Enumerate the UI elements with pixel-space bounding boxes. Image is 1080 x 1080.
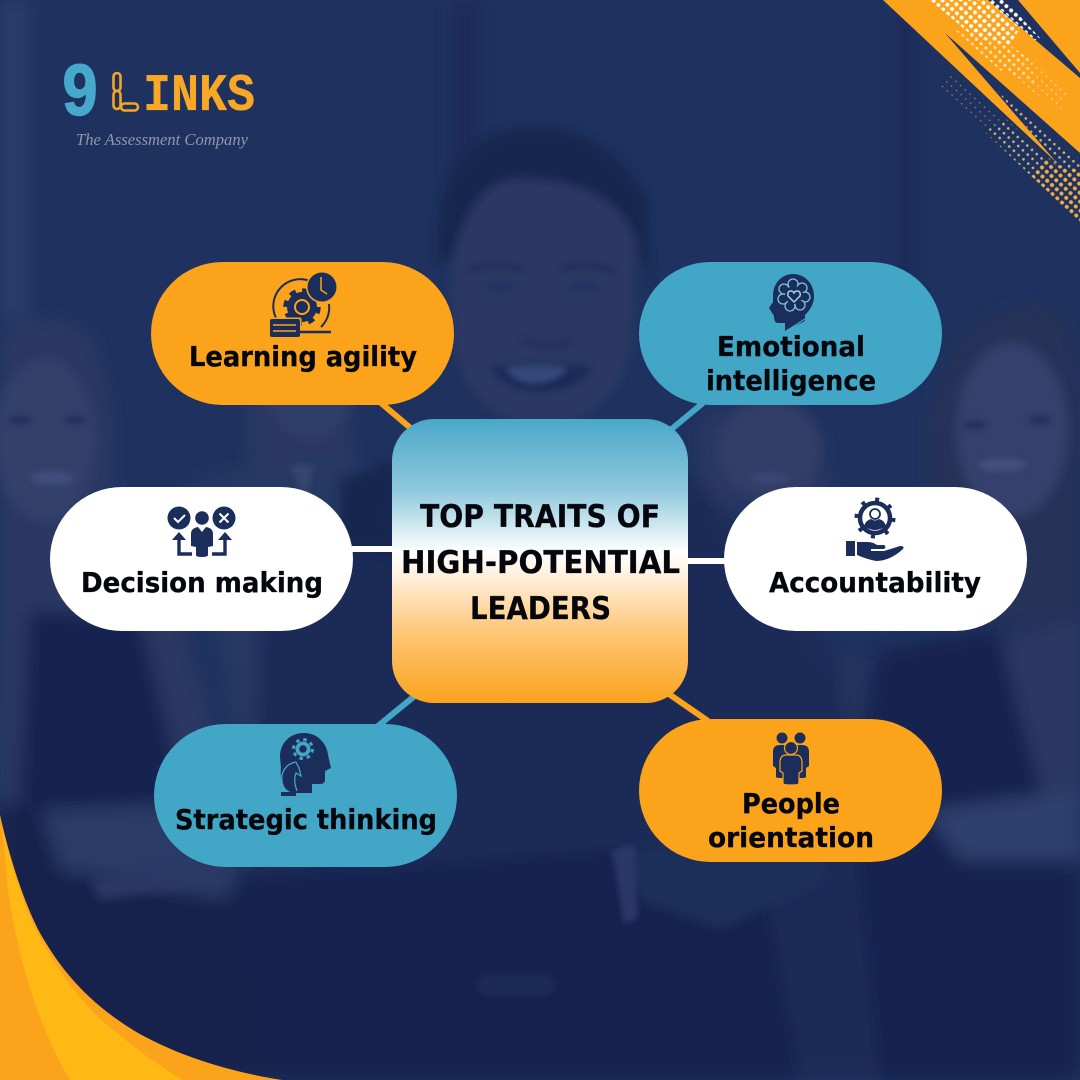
center panel: title xyxy=(392,419,688,703)
panel: emotional intelligence xyxy=(639,262,942,405)
label: Strategic thinking xyxy=(175,804,437,836)
logo tagline: The Assessment Company xyxy=(76,130,248,149)
label: Emotional xyxy=(717,331,865,363)
label: intelligence xyxy=(706,365,876,397)
panel: strategic thinking xyxy=(154,724,457,867)
title text: LEADERS xyxy=(470,591,611,627)
bottom-left decorative waves xyxy=(0,815,282,1080)
logo numeral 9: 9 xyxy=(62,51,98,131)
label: Accountability xyxy=(769,567,981,599)
panel: accountability xyxy=(724,487,1027,631)
connector: people orientation xyxy=(666,692,708,721)
logo wordmark: INKS xyxy=(143,66,255,126)
connector: accountability xyxy=(686,558,726,564)
icon: gear person over open hand xyxy=(846,500,904,561)
icon: group of three people xyxy=(773,732,809,785)
connector: learning agility xyxy=(381,403,414,431)
logo chain-link letter L xyxy=(114,73,138,110)
label: orientation xyxy=(708,822,874,854)
panel: learning agility xyxy=(151,262,454,405)
label: Learning agility xyxy=(189,341,417,373)
label: People xyxy=(742,788,840,820)
logo xyxy=(62,51,255,149)
title text: TOP TRAITS OF xyxy=(420,499,660,535)
top-right decorative orange streaks xyxy=(883,0,1080,222)
icon: gear with clock xyxy=(268,271,338,338)
icon: head with gear and chess knight xyxy=(280,733,331,796)
panel: people orientation xyxy=(639,719,942,862)
colleagues' smiles xyxy=(30,471,74,485)
panel: decision making xyxy=(50,487,353,631)
label: Decision making xyxy=(81,567,323,599)
label xyxy=(708,788,874,854)
icon: head with heart brain xyxy=(769,274,814,331)
man's eyes, brows, nose, smile xyxy=(470,265,615,272)
title text: HIGH-POTENTIAL xyxy=(401,545,680,581)
connector: decision making xyxy=(352,546,394,552)
connector: strategic thinking xyxy=(378,694,417,726)
label xyxy=(706,331,876,397)
connector: emotional intelligence xyxy=(668,403,703,432)
title text xyxy=(401,499,680,627)
icon: person choosing between check and cross xyxy=(168,506,236,557)
